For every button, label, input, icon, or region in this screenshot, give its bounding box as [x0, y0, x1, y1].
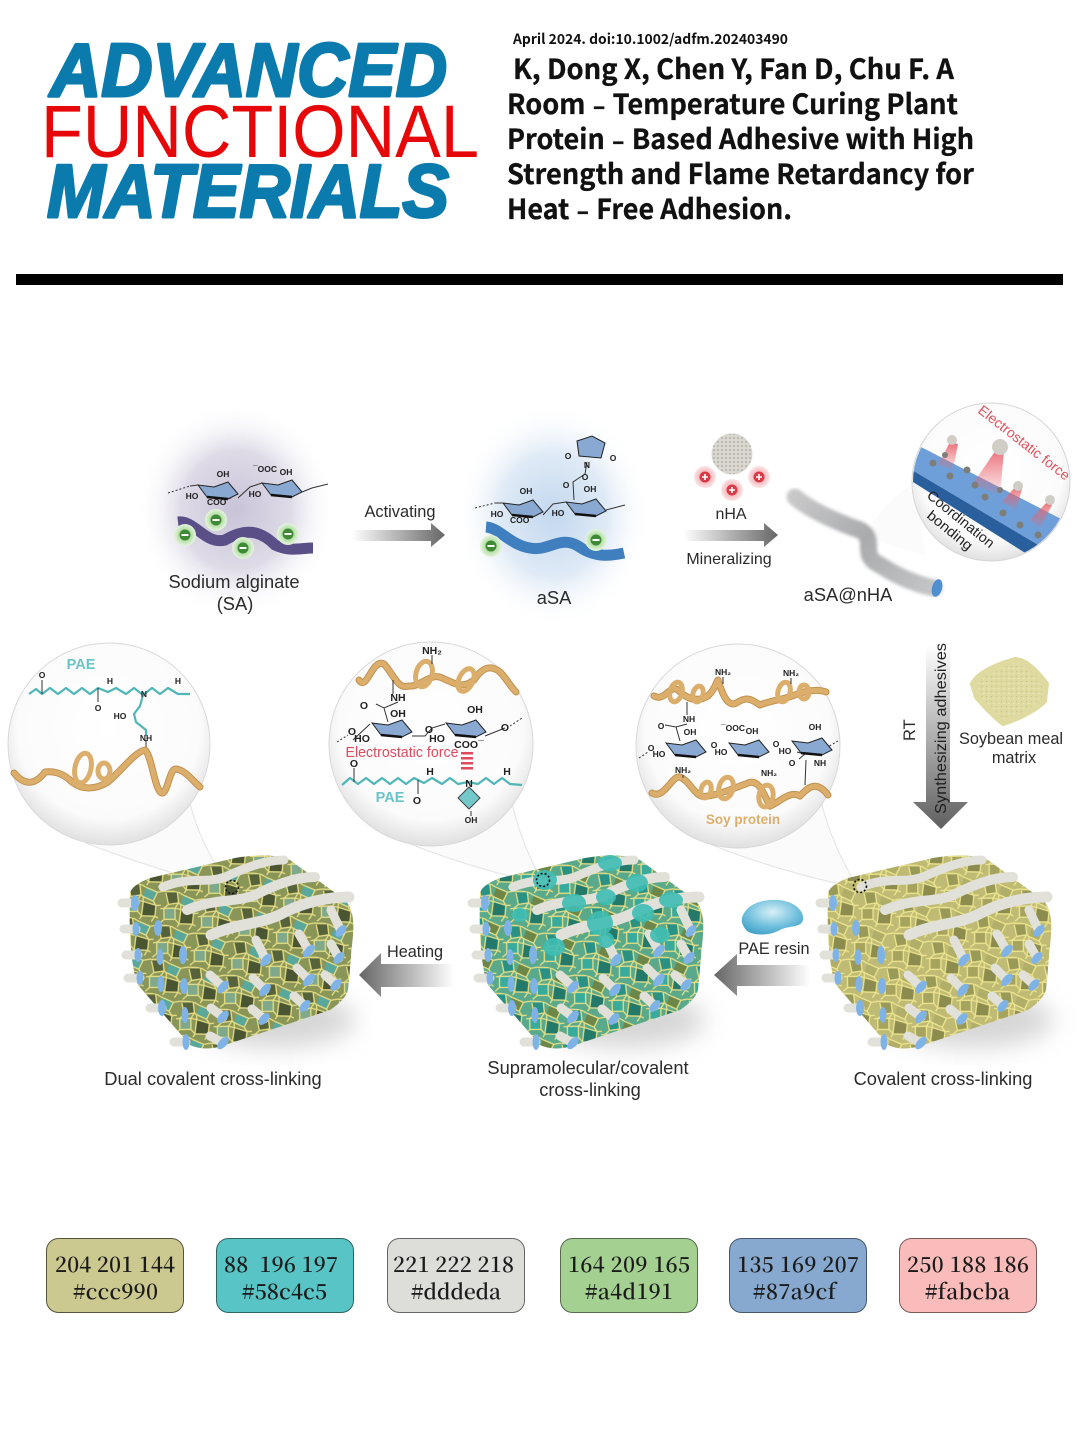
- swatch: fabcba: 250 188 186: [907, 1249, 1029, 1279]
- header divider: [16, 274, 1063, 285]
- bubble: supramolecular molecular view: H: [426, 766, 434, 778]
- panel: sodium alginate: HO: [186, 491, 199, 501]
- cube: covalent cross-linking: [820, 855, 1053, 1089]
- fiber: aSA@nHA: [795, 482, 944, 605]
- citation text: [507, 29, 975, 228]
- cube: dual covalent cross-linking: Dual covalent cross-linking: [104, 1068, 322, 1089]
- bubble: supramolecular molecular view: O: [348, 726, 356, 738]
- bubble: covalent molecular view: NH₂: [783, 668, 799, 678]
- bubble: dual covalent molecular view: PAE: [67, 657, 96, 673]
- cube: supramolecular covalent cross-linking: Supramolecular/covalent: [487, 1057, 689, 1078]
- swatch: 87a9cf: [730, 1238, 866, 1312]
- bubble: dual covalent molecular view: [8, 643, 210, 845]
- swatch: 58c4c5: 88 196 197: [224, 1249, 338, 1279]
- bubble: dual covalent molecular view: NH: [140, 733, 152, 743]
- bubble: supramolecular molecular view: Electrostatic force: [346, 745, 458, 761]
- bubble: dual covalent molecular view: HO: [114, 711, 127, 721]
- bubble: covalent molecular view: OH: [746, 726, 758, 736]
- bubble: covalent molecular view: ¯OOC: [720, 723, 745, 733]
- panel: aSA: COO¯: [510, 515, 534, 525]
- bubble: covalent molecular view: O: [789, 758, 796, 768]
- bubble: supramolecular molecular view: O: [350, 758, 358, 770]
- bubble: dual covalent molecular view: H: [175, 676, 181, 686]
- icon: soybean meal matrix: Soybean meal: [959, 730, 1063, 748]
- swatch: 58c4c5: #58c4c5: [242, 1276, 327, 1306]
- bubble: covalent molecular view: O: [658, 721, 665, 731]
- bubble: covalent molecular view: NH: [683, 714, 695, 724]
- panel: sodium alginate: OH: [280, 467, 292, 477]
- bubble: electrostatic and coordination detail: bonding: [924, 507, 976, 553]
- bubble: dual covalent molecular view: N: [141, 689, 147, 699]
- arrow: mineralizing with nHA: nHA: [715, 506, 747, 523]
- arrow: heating: [359, 943, 454, 997]
- bubble: supramolecular molecular view: O: [501, 722, 509, 734]
- bubble tails: [86, 803, 858, 890]
- swatch: fabcba: #fabcba: [925, 1276, 1010, 1306]
- arrow: synthesizing adhesives: Synthesizing adhesives: [933, 643, 950, 814]
- arrow: activating: [352, 503, 445, 547]
- bubble: covalent molecular view: NH₂: [715, 667, 731, 677]
- bubble: supramolecular molecular view: PAE: [376, 790, 405, 806]
- bubble: supramolecular molecular view: N: [465, 778, 473, 790]
- bubble: covalent molecular view: OH: [809, 722, 821, 732]
- arrow: mineralizing with nHA: Mineralizing: [686, 551, 772, 568]
- bubble: supramolecular molecular view: O: [360, 700, 368, 712]
- cube: dual covalent cross-linking: [104, 855, 355, 1089]
- swatch: a4d191: 164 209 165: [568, 1249, 690, 1279]
- bubble: supramolecular molecular view: NH: [390, 692, 406, 704]
- swatch: ccc990: 204 201 144: [55, 1249, 175, 1279]
- bubble: dual covalent molecular view: O: [95, 703, 102, 713]
- panel: aSA: [455, 403, 651, 627]
- fiber: aSA@nHA: aSA@nHA: [804, 584, 893, 605]
- panel: sodium alginate: [136, 402, 336, 618]
- bubble: covalent molecular view: NH: [814, 758, 826, 768]
- citation text: Room﹣Temperature Curing Plant: [507, 83, 958, 123]
- arrow: PAE resin: PAE resin: [738, 940, 810, 958]
- bubble: covalent molecular view: OH: [684, 727, 696, 737]
- bubble: supramolecular molecular view: COO¯: [454, 739, 484, 751]
- panel: aSA: O: [565, 451, 572, 461]
- bubble: electrostatic and coordination detail: [912, 402, 1073, 561]
- bubble: supramolecular molecular view: OH: [390, 708, 406, 720]
- journal logo: MATERIALS: [47, 149, 449, 233]
- swatch: dddeda: 221 222 218: [393, 1249, 514, 1279]
- bubble: covalent molecular view: NH₂: [761, 768, 777, 778]
- panel: aSA: O: [582, 472, 589, 482]
- swatch: 87a9cf: #87a9cf: [753, 1276, 838, 1306]
- swatch: dddeda: #dddeda: [411, 1276, 501, 1306]
- bubble: covalent molecular view: [636, 644, 840, 848]
- bubble: supramolecular molecular view: HO: [429, 733, 445, 745]
- swatch: dddeda: [388, 1238, 524, 1312]
- citation text: Heat﹣Free Adhesion.: [507, 188, 792, 228]
- bubble: covalent molecular view: HO: [653, 749, 666, 759]
- swatch: 87a9cf: 135 169 207: [737, 1249, 859, 1279]
- bubble: supramolecular molecular view: OH: [467, 704, 483, 716]
- arrow: activating: Activating: [364, 503, 436, 521]
- panel: sodium alginate: ¯OOC: [252, 464, 277, 474]
- panel: aSA: aSA: [537, 587, 572, 608]
- icon: soybean meal matrix: [959, 660, 1063, 767]
- bubble: covalent molecular view: NH₂: [675, 765, 691, 775]
- bubble: supramolecular molecular view: NH₂: [422, 645, 442, 657]
- citation text: Strength and Flame Retardancy for: [507, 153, 975, 193]
- panel: sodium alginate: Sodium alginate: [168, 571, 300, 592]
- bubble: supramolecular molecular view: H: [503, 766, 511, 778]
- swatch: ccc990: #ccc990: [73, 1276, 158, 1306]
- panel: sodium alginate: COO¯: [207, 497, 231, 507]
- bubble: supramolecular molecular view: HO: [354, 733, 370, 745]
- panel: aSA: O: [610, 453, 617, 463]
- bubble: supramolecular molecular view: O: [425, 724, 433, 736]
- journal logo: FUNCTIONAL: [41, 90, 479, 173]
- bubble: covalent molecular view: HO: [715, 747, 728, 757]
- swatch: 58c4c5: [216, 1238, 354, 1312]
- bubble: electrostatic and coordination detail: Coordination: [924, 487, 998, 551]
- cube: supramolecular covalent cross-linking: cross-linking: [539, 1079, 641, 1100]
- bubble: covalent molecular view: HO: [779, 746, 792, 756]
- panel: aSA: N: [584, 460, 590, 470]
- journal logo: [41, 28, 479, 233]
- panel: aSA: O: [563, 480, 570, 490]
- bubble: dual covalent molecular view: O: [39, 670, 46, 680]
- bubble: covalent molecular view: O: [773, 739, 780, 749]
- bubble: electrostatic and coordination detail: Electrostatic force: [975, 402, 1073, 483]
- panel: aSA: OH: [520, 486, 532, 496]
- journal logo: ADVANCED: [48, 28, 447, 112]
- citation text: Protein﹣Based Adhesive with High: [507, 118, 974, 158]
- bubble: covalent molecular view: Soy protein: [706, 812, 780, 827]
- bubble: dual covalent molecular view: H: [107, 676, 113, 686]
- bubble: supramolecular molecular view: O: [413, 795, 421, 807]
- arrow: synthesizing adhesives: [901, 643, 968, 829]
- arrow: mineralizing with nHA: [683, 434, 778, 568]
- swatch: fabcba: [900, 1238, 1036, 1312]
- panel: sodium alginate: (SA): [217, 593, 253, 614]
- arrow: synthesizing adhesives: RT: [901, 719, 919, 741]
- bubble: covalent molecular view: O: [711, 740, 718, 750]
- swatch: a4d191: #a4d191: [585, 1276, 673, 1306]
- icon: soybean meal matrix: matrix: [992, 749, 1036, 767]
- panel: aSA: HO: [491, 509, 504, 519]
- citation text: K, Dong X, Chen Y, Fan D, Chu F. A: [513, 48, 955, 88]
- panel: sodium alginate: HO: [249, 489, 262, 499]
- panel: aSA: HO: [552, 508, 565, 518]
- bubble: supramolecular molecular view: [329, 642, 533, 846]
- citation text: April 2024. doi:10.1002/adfm.202403490: [512, 29, 788, 49]
- arrow: heating: Heating: [387, 943, 443, 961]
- bubble: covalent molecular view: O: [648, 743, 655, 753]
- panel: sodium alginate: OH: [217, 469, 229, 479]
- swatch: a4d191: [560, 1238, 698, 1312]
- swatch: ccc990: [46, 1238, 184, 1312]
- cube: supramolecular covalent cross-linking: [472, 855, 705, 1100]
- cube: covalent cross-linking: Covalent cross-linking: [854, 1068, 1032, 1089]
- bubble: supramolecular molecular view: OH: [465, 815, 477, 825]
- panel: aSA: OH: [584, 484, 596, 494]
- arrow: PAE resin: [714, 900, 810, 996]
